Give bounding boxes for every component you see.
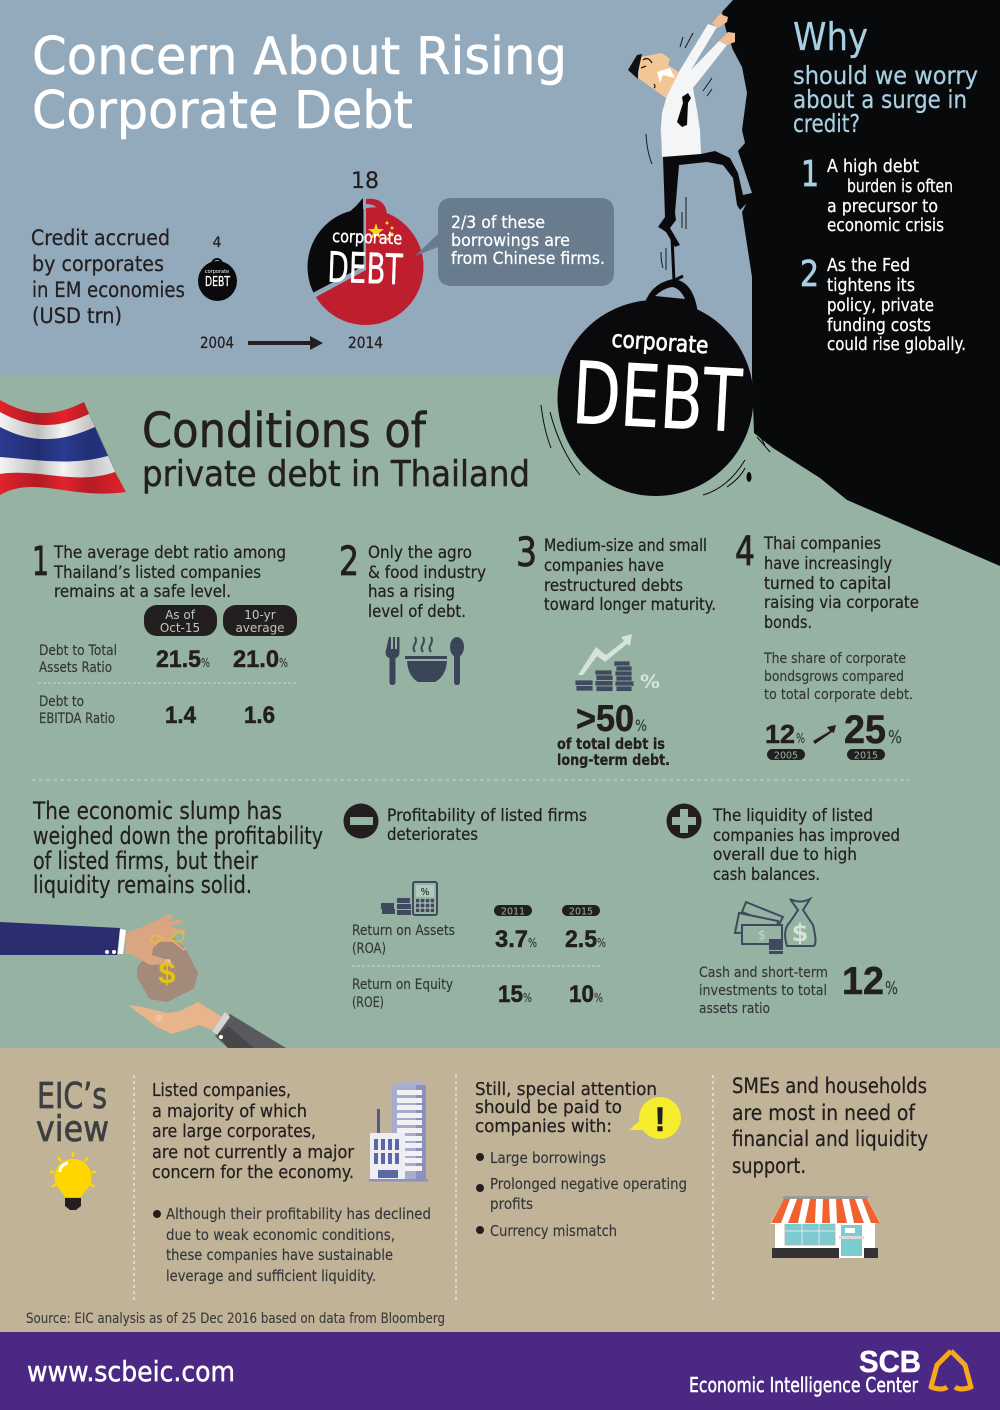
reason 1: A high debt bbox=[827, 156, 919, 177]
table: ROA and ROE: % bbox=[594, 991, 603, 1005]
reason 1: burden is often bbox=[847, 176, 953, 197]
stat: 12 to 25 percent: 2015 bbox=[854, 750, 878, 762]
black cliff bbox=[722, 0, 1000, 566]
callout: chinese firms: from Chinese firms. bbox=[451, 249, 605, 269]
icon: SCB orange emblem bbox=[931, 1351, 971, 1389]
heading: conditions of private debt in thailand bbox=[142, 403, 530, 495]
footer url: www.scbeic.com bbox=[27, 1355, 235, 1388]
reason 2 bbox=[800, 254, 966, 355]
table: debt ratios: Assets Ratio bbox=[39, 660, 112, 676]
reason 2: policy, private bbox=[827, 295, 934, 316]
chart: large debt weight 2014 split pie bbox=[308, 169, 424, 325]
stat: 12 to 25 percent: 25 bbox=[844, 708, 886, 752]
panel: why should we worry bbox=[793, 15, 978, 355]
text: point 4: raising via corporate bbox=[764, 593, 919, 613]
stat: 12 percent cash ratio: % bbox=[885, 978, 898, 999]
text: point 4 bbox=[763, 534, 919, 633]
panel: point 3 longer maturity bbox=[516, 530, 716, 769]
bullet text bbox=[153, 1205, 431, 1285]
table: debt ratios: Debt to bbox=[39, 694, 84, 710]
text: point 3: toward longer maturity. bbox=[544, 595, 716, 615]
heading: conditions of private debt in thailand: Conditions of bbox=[142, 403, 427, 459]
stat: 12 to 25 percent: 2005 bbox=[774, 750, 798, 762]
table: debt ratios: 21.0 bbox=[233, 646, 279, 673]
icon: light bulb bbox=[50, 1152, 96, 1210]
stat: more than 50 percent: long-term debt. bbox=[557, 751, 670, 769]
stat: more than 50 percent: of total debt is bbox=[557, 735, 665, 753]
text: point 2: level of debt. bbox=[368, 602, 466, 622]
reason 2: could rise globally. bbox=[827, 334, 966, 355]
stat: 12 to 25 percent: % bbox=[796, 732, 805, 747]
man: rope bbox=[672, 237, 674, 281]
table: ROA and ROE: 2015 bbox=[569, 906, 593, 918]
bullet text: leverage and sufficient liquidity. bbox=[166, 1267, 376, 1285]
background: tan section bbox=[0, 1048, 1000, 1332]
man: motion lines bbox=[646, 33, 712, 270]
money bag bbox=[138, 932, 197, 1001]
stat: 12 percent cash ratio: assets ratio bbox=[699, 1001, 770, 1017]
text: economic slump statement: liquidity remains solid. bbox=[33, 871, 252, 899]
table: debt ratios: As of bbox=[165, 608, 196, 622]
text: point 1: Thailand’s listed companies bbox=[53, 563, 261, 583]
icon: cash and money bag bbox=[735, 899, 816, 954]
panel: listed companies view: are large corporates, bbox=[152, 1122, 316, 1142]
reason 1: 1 bbox=[801, 154, 819, 195]
text: point 3: restructured debts bbox=[544, 576, 683, 596]
text: point 2: Only the agro bbox=[368, 543, 472, 563]
chart: small debt weight 2004 bbox=[198, 235, 237, 301]
table: ROA and ROE: % bbox=[523, 991, 532, 1005]
background: green section bbox=[0, 375, 1000, 1048]
panel: point 2 agro and food: 2 bbox=[339, 539, 359, 585]
chart: large debt weight 2014 split pie: DEBT bbox=[327, 243, 404, 294]
table: ROA and ROE: % bbox=[597, 936, 606, 950]
panel: special attention: Still, special attention bbox=[475, 1079, 657, 1100]
text: point 2: & food industry bbox=[368, 563, 486, 583]
text: point 2 bbox=[368, 543, 486, 622]
icon: cash and money bag: $ bbox=[792, 919, 808, 947]
text: economic slump statement: The economic slump has bbox=[32, 797, 282, 825]
table: debt ratios: average bbox=[235, 621, 285, 635]
reason 2: tightens its bbox=[827, 275, 915, 296]
table: debt ratios: Oct-15 bbox=[160, 621, 200, 635]
text: point 4: have increasingly bbox=[764, 554, 892, 574]
background: top blue section bbox=[0, 0, 1000, 376]
callout: chinese firms bbox=[415, 198, 614, 286]
footer logo: SCB Economic Intelligence Center: Economic Intelligence Center bbox=[689, 1373, 919, 1397]
panel: liquidity improved: cash balances. bbox=[713, 865, 820, 885]
bullet text: due to weak economic conditions, bbox=[166, 1226, 395, 1244]
table: debt ratios: EBITDA Ratio bbox=[39, 711, 115, 727]
table: ROA and ROE: (ROA) bbox=[352, 941, 386, 957]
man: tie bbox=[677, 93, 691, 127]
panel: EIC's view heading bbox=[36, 1076, 109, 1210]
table: ROA and ROE: Return on Equity bbox=[352, 977, 453, 993]
man: hands bbox=[712, 14, 735, 45]
panel: liquidity improved bbox=[666, 804, 900, 1017]
ribbon bbox=[151, 932, 184, 943]
text: economic slump statement: of listed firms, but their bbox=[33, 847, 258, 875]
panel: point 1 debt ratio: 1 bbox=[32, 539, 49, 585]
panel: SMEs and households: are most in need of bbox=[732, 1101, 916, 1125]
text: point 4: Thai companies bbox=[763, 534, 881, 554]
timeline arrow 2004 to 2014: 2004 bbox=[200, 333, 234, 352]
stat: 12 percent cash ratio bbox=[699, 960, 898, 1017]
pie: red two-thirds slice bbox=[308, 199, 424, 325]
panel: listed companies view bbox=[152, 1081, 431, 1285]
panel: SMEs and households: financial and liquidity bbox=[732, 1127, 928, 1151]
panel: listed companies view: Listed companies, bbox=[152, 1081, 291, 1101]
callout: chinese firms: borrowings are bbox=[451, 231, 570, 251]
stat: 12 to 25 percent bbox=[765, 708, 902, 762]
table: ROA and ROE bbox=[352, 905, 606, 1011]
panel: EIC's view heading: view bbox=[36, 1109, 109, 1150]
icon: coin stacks with rising arrow bbox=[575, 634, 660, 693]
bullet list bbox=[476, 1149, 687, 1240]
panel: special attention: companies with: bbox=[475, 1116, 612, 1137]
man: shirt and arms bbox=[660, 24, 727, 157]
callout: chinese firms: 2/3 of these bbox=[451, 213, 545, 233]
text: credit accrued label: Credit accrued bbox=[31, 226, 170, 250]
panel: listed companies view: a majority of which bbox=[152, 1102, 307, 1122]
illustration: hands passing money bag bbox=[0, 914, 286, 1048]
text: point 3: companies have bbox=[544, 556, 664, 576]
text: point 1: The average debt ratio among bbox=[53, 543, 286, 563]
footer logo: SCB Economic Intelligence Center: SCB bbox=[859, 1344, 921, 1379]
panel: liquidity improved: overall due to high bbox=[713, 845, 857, 865]
stat: more than 50 percent: >50 bbox=[576, 698, 634, 739]
reason 1: economic crisis bbox=[827, 215, 944, 236]
panel: SMEs and households bbox=[732, 1074, 928, 1258]
stat: 12 percent cash ratio: 12 bbox=[842, 960, 884, 1003]
stat: 12 percent cash ratio: investments to total bbox=[699, 983, 827, 999]
heading: why: should we worry bbox=[793, 61, 978, 90]
text: share of corporate bonds: to total corporate debt. bbox=[764, 687, 913, 703]
bullet list: Currency mismatch bbox=[490, 1222, 617, 1240]
heading: why bbox=[793, 15, 978, 138]
table: debt ratios: % bbox=[279, 656, 288, 670]
table: debt ratios: 1.6 bbox=[244, 702, 275, 729]
navy sleeve bbox=[0, 922, 120, 955]
text: credit accrued label: by corporates bbox=[32, 252, 164, 276]
heading: why: Why bbox=[793, 15, 868, 59]
text: share of corporate bonds: bondsgrows compared bbox=[764, 669, 904, 685]
panel: point 4 corporate bonds: 4 bbox=[735, 529, 755, 575]
bullet list: Large borrowings bbox=[490, 1149, 606, 1167]
table: ROA and ROE: % bbox=[528, 936, 537, 950]
table: ROA and ROE: 2.5 bbox=[565, 926, 597, 953]
stat: 12 percent cash ratio: Cash and short-term bbox=[699, 965, 828, 981]
stat: 12 to 25 percent: % bbox=[888, 727, 902, 748]
text: share of corporate bonds: The share of corporate bbox=[763, 651, 906, 667]
dollar sign: $ bbox=[158, 955, 176, 990]
text: economic slump statement bbox=[32, 797, 323, 899]
stat: 12 to 25 percent: 12 bbox=[765, 719, 795, 749]
panel: liquidity improved: The liquidity of listed bbox=[712, 806, 873, 826]
timeline arrow 2004 to 2014: 2014 bbox=[348, 333, 383, 352]
icon: office buildings bbox=[369, 1081, 428, 1182]
table: debt ratios: 10-yr bbox=[244, 608, 276, 622]
panel: profitability deteriorates bbox=[344, 804, 606, 1011]
bullet text: Although their profitability has declined bbox=[166, 1205, 431, 1223]
text: credit accrued label bbox=[31, 226, 185, 328]
bullet text: these companies have sustainable bbox=[166, 1246, 393, 1264]
panel: point 2 agro and food bbox=[339, 539, 486, 685]
bullet list: profits bbox=[490, 1195, 533, 1213]
text: point 1 bbox=[53, 543, 286, 602]
chart: large debt weight 2014 split pie: corporate bbox=[332, 227, 403, 249]
table: debt ratios bbox=[38, 605, 297, 729]
table: debt ratios: 21.5 bbox=[156, 646, 201, 673]
table: debt ratios: 1.4 bbox=[165, 702, 196, 729]
chart: small debt weight 2004: corporate bbox=[205, 269, 229, 275]
footer logo: SCB Economic Intelligence Center bbox=[689, 1344, 971, 1397]
icon: cash and money bag: $ bbox=[758, 928, 766, 942]
reason 2: 2 bbox=[800, 254, 819, 295]
dark sleeve bbox=[215, 1014, 286, 1048]
heading: conditions of private debt in thailand: private debt in Thailand bbox=[142, 454, 530, 495]
table: ROA and ROE: 3.7 bbox=[495, 926, 528, 953]
background: purple footer bbox=[0, 1332, 1000, 1410]
text: point 4: bonds. bbox=[764, 613, 812, 633]
icon: minus circle bbox=[344, 804, 378, 838]
panel: SMEs and households: SMEs and households bbox=[732, 1074, 927, 1098]
reason 1: a precursor to bbox=[827, 196, 938, 217]
icon: exclamation bubble bbox=[629, 1097, 681, 1139]
table: ROA and ROE: 2011 bbox=[501, 906, 525, 918]
icon: thai flag bbox=[0, 400, 126, 495]
text: point 4: turned to capital bbox=[764, 574, 891, 594]
table: ROA and ROE: Return on Assets bbox=[352, 923, 455, 939]
text: credit accrued label: in EM economies bbox=[32, 278, 185, 302]
bullet list: Prolonged negative operating bbox=[490, 1175, 687, 1193]
source note: Source: EIC analysis as of 25 Dec 2016 based on data from Bloomberg bbox=[26, 1311, 445, 1327]
illustration: big corporate debt weight bbox=[541, 276, 770, 496]
icon: food bowl and cutlery bbox=[386, 637, 464, 685]
panel: listed companies view: are not currently a major bbox=[152, 1143, 355, 1163]
panel: SMEs and households: support. bbox=[732, 1154, 806, 1178]
title bbox=[32, 27, 567, 141]
stat: more than 50 percent: % bbox=[635, 716, 647, 735]
icon: storefront bbox=[771, 1196, 880, 1258]
icon: exclamation bubble: ! bbox=[654, 1101, 666, 1139]
title: Concern About Rising bbox=[32, 27, 567, 87]
table: ROA and ROE: 10 bbox=[569, 981, 594, 1008]
panel: special attention bbox=[475, 1079, 687, 1240]
icon: coin stacks with rising arrow: % bbox=[640, 671, 660, 693]
table: ROA and ROE: (ROE) bbox=[352, 995, 384, 1011]
panel: profitability deteriorates: deteriorates bbox=[387, 825, 478, 845]
lower hand bbox=[128, 1002, 222, 1034]
table: debt ratios: % bbox=[201, 656, 210, 670]
text: point 3: Medium-size and small bbox=[544, 536, 707, 556]
timeline arrow 2004 to 2014 bbox=[200, 333, 383, 352]
text: share of corporate bonds bbox=[763, 651, 913, 703]
icon: calculator and coins bbox=[381, 882, 437, 915]
panel: liquidity improved: companies has improved bbox=[713, 826, 900, 846]
chart: small debt weight 2004: DEBT bbox=[205, 275, 230, 290]
table: ROA and ROE: 15 bbox=[498, 981, 523, 1008]
heading: why: about a surge in bbox=[793, 85, 967, 114]
cuff bbox=[118, 929, 126, 954]
chart: large debt weight 2014 split pie: 18 bbox=[351, 169, 379, 194]
illustration: big corporate debt weight: corporate bbox=[611, 327, 709, 359]
text: point 3 bbox=[544, 536, 716, 615]
title: Corporate Debt bbox=[32, 81, 413, 141]
pie: black one-third slice bbox=[308, 198, 364, 292]
illustration: big corporate debt weight: DEBT bbox=[570, 344, 744, 452]
table: debt ratios: Debt to Total bbox=[39, 643, 117, 659]
stat: more than 50 percent bbox=[557, 698, 670, 769]
text: economic slump statement: weighed down the profitability bbox=[33, 822, 323, 850]
reason 2: funding costs bbox=[827, 315, 931, 336]
panel: EIC's view heading: EIC’s bbox=[37, 1076, 107, 1117]
reason 2: As the Fed bbox=[827, 255, 910, 276]
panel: point 1 debt ratio bbox=[32, 539, 297, 729]
panel: special attention: should be paid to bbox=[475, 1097, 622, 1118]
text: credit accrued label: (USD trn) bbox=[32, 304, 122, 328]
icon: china flag stars bbox=[368, 222, 394, 240]
icon: calculator and coins: % bbox=[420, 887, 430, 898]
man: legs and shoes bbox=[658, 151, 753, 247]
upper hand bbox=[125, 914, 188, 965]
illustration: man hanging from cliff bbox=[628, 14, 753, 281]
chart: small debt weight 2004: 4 bbox=[213, 235, 222, 251]
heading: why: credit? bbox=[793, 109, 860, 138]
panel: profitability deteriorates: Profitability of listed firms bbox=[387, 806, 587, 826]
text: point 1: remains at a safe level. bbox=[54, 582, 231, 602]
text: point 2: has a rising bbox=[368, 582, 455, 602]
panel: point 3 longer maturity: 3 bbox=[516, 530, 537, 576]
reason 1 bbox=[801, 154, 953, 236]
icon: plus circle bbox=[666, 804, 702, 838]
panel: point 4 corporate bonds bbox=[735, 529, 919, 762]
panel: listed companies view: concern for the economy. bbox=[152, 1163, 354, 1183]
man: head bbox=[638, 53, 679, 98]
